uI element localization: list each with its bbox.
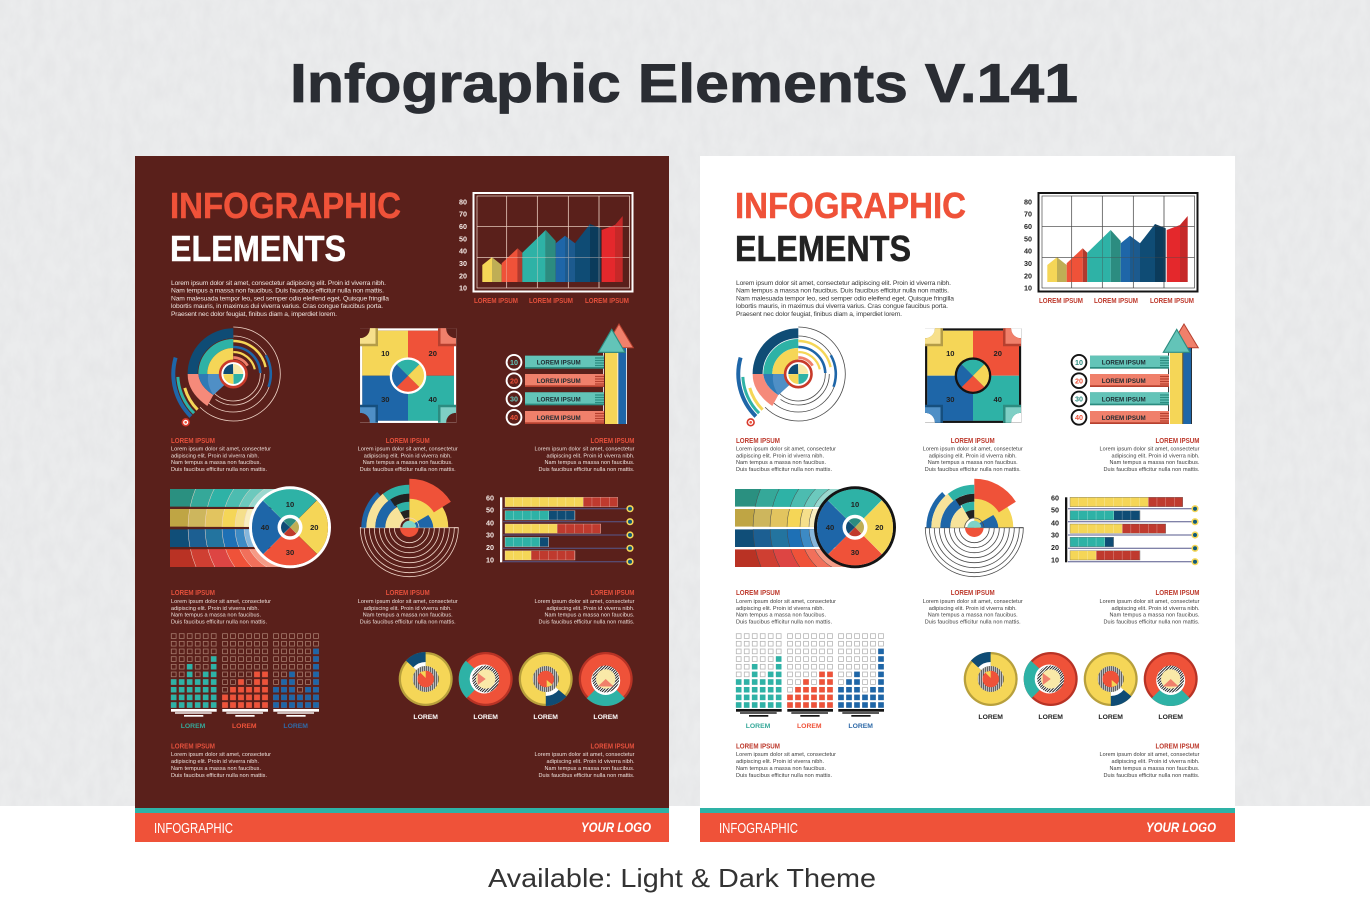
footer: YOUR LOGO xyxy=(581,819,651,835)
text block: row 2 left: LOREM IPSUM xyxy=(171,590,215,597)
text block: row 2 centre: Duis faucibus efficitur nulla non mattis. xyxy=(925,620,1021,626)
chart: area chart: 60 xyxy=(459,222,467,231)
chart: area chart: 80 xyxy=(459,197,467,206)
text block: row 2 left: Nam tempus a massa non faucibus. xyxy=(736,612,826,618)
chart: square quadrants xyxy=(925,328,1021,423)
chart: square quadrants: 30 xyxy=(381,395,390,404)
text block: intro: Nam malesuada tempor leo, sed semper odio eleifend eget. Quisque fringilla xyxy=(171,296,389,302)
text block: row 1 centre: Duis faucibus efficitur nulla non mattis. xyxy=(360,467,456,473)
chart: arrows with labelled bars: 30 xyxy=(510,395,518,404)
text block: row 1 right: LOREM IPSUM xyxy=(590,438,635,445)
chart: square unit grids: LOREM xyxy=(797,723,822,730)
chart: fan bars with pie: 20 xyxy=(875,523,884,532)
text block: row 1 centre: Nam tempus a massa non faucibus. xyxy=(363,460,453,466)
chart: area chart: 50 xyxy=(1024,234,1032,243)
text block: row 2 centre xyxy=(923,590,1023,626)
chart: area chart: LOREM IPSUM xyxy=(474,298,518,305)
chart: horizontal segmented bars xyxy=(486,494,633,564)
text block: row 1 right xyxy=(1100,438,1200,473)
text block: row 2 centre: Nam tempus a massa non faucibus. xyxy=(928,612,1018,618)
chart: arrows with labelled bars: LOREM IPSUM xyxy=(1102,378,1146,385)
chart: square unit grids: LOREM xyxy=(848,723,873,730)
chart: four donuts: LOREM xyxy=(1158,714,1183,721)
heading: infographic elements: INFOGRAPHIC xyxy=(735,185,966,226)
text block: row 2 right xyxy=(534,590,635,626)
text block: row 2 centre: Nam tempus a massa non faucibus. xyxy=(363,612,453,618)
text block: row 1 centre: Nam tempus a massa non faucibus. xyxy=(928,460,1018,466)
chart: fan bars with pie: 30 xyxy=(851,548,859,557)
text block: row 2 left: Duis faucibus efficitur nulla non mattis. xyxy=(171,620,267,626)
text block: row 1 centre xyxy=(358,438,458,473)
text block: row 3 left: Duis faucibus efficitur nulla non mattis. xyxy=(171,773,267,779)
chart: area chart: 10 xyxy=(1024,284,1032,293)
text block: row 2 right: Nam tempus a massa non faucibus. xyxy=(1110,612,1200,618)
text block: row 1 right: Duis faucibus efficitur nulla non mattis. xyxy=(538,467,635,473)
text block: row 2 left: adipiscing elit. Proin id viverra nibh. xyxy=(171,606,259,612)
chart: arrows with labelled bars: 20 xyxy=(1075,376,1083,385)
chart: four donuts xyxy=(397,650,635,721)
text block: row 2 right: Lorem ipsum dolor sit amet, consectetur xyxy=(534,599,635,605)
chart: arrows with labelled bars xyxy=(1072,324,1198,425)
text block: row 2 right: Nam tempus a massa non faucibus. xyxy=(544,612,635,618)
text block: row 1 left: LOREM IPSUM xyxy=(736,438,780,445)
text block: row 2 left: Lorem ipsum dolor sit amet, consectetur xyxy=(171,599,271,605)
subtitle: Available: Light & Dark Theme xyxy=(488,863,876,893)
footer xyxy=(700,808,1235,842)
text block: row 3 right xyxy=(1100,744,1200,779)
chart: square quadrants: 20 xyxy=(993,349,1002,358)
text block: row 2 centre xyxy=(358,590,458,626)
text block: intro: Lorem ipsum dolor sit amet, consectetur adipiscing elit. Proin id viverra nibh. xyxy=(171,280,386,287)
chart: area chart: 30 xyxy=(459,259,467,268)
text block: intro: Nam malesuada tempor leo, sed semper odio eleifend eget. Quisque fringilla xyxy=(736,296,954,302)
chart: arrows with labelled bars xyxy=(507,324,633,425)
chart: horizontal segmented bars: 20 xyxy=(1051,543,1059,552)
text block: row 2 centre: LOREM IPSUM xyxy=(951,590,995,597)
chart: square unit grids: LOREM xyxy=(746,723,771,730)
chart: area chart: 60 xyxy=(1024,222,1032,231)
chart: half radial xyxy=(355,474,463,582)
chart: fan bars with pie: 30 xyxy=(286,548,294,557)
text block: row 3 left: Duis faucibus efficitur nulla non mattis. xyxy=(736,773,832,779)
chart: four donuts: LOREM xyxy=(473,714,498,721)
chart: fan bars with pie: 20 xyxy=(310,523,319,532)
chart: square quadrants: 10 xyxy=(946,349,955,358)
chart: square quadrants: 10 xyxy=(381,349,390,358)
text block: row 2 left: Lorem ipsum dolor sit amet, consectetur xyxy=(736,599,836,605)
chart: horizontal segmented bars xyxy=(1051,494,1198,564)
text block: row 2 right: Duis faucibus efficitur nulla non mattis. xyxy=(538,620,635,626)
text block: row 3 right: Lorem ipsum dolor sit amet, consectetur xyxy=(1100,752,1200,758)
chart: radial arcs xyxy=(713,289,883,459)
chart: square unit grids: LOREM xyxy=(232,723,257,730)
text block: row 2 centre: Lorem ipsum dolor sit amet, consectetur xyxy=(358,599,458,605)
heading: infographic elements xyxy=(170,185,401,269)
text block: row 1 right: Nam tempus a massa non faucibus. xyxy=(1110,460,1200,466)
text block: row 3 left: Nam tempus a massa non faucibus. xyxy=(171,766,261,772)
text block: intro: Praesent nec dolor feugiat, finibus diam a, imperdiet lorem. xyxy=(171,311,337,318)
text block: row 3 left: adipiscing elit. Proin id viverra nibh. xyxy=(171,759,259,765)
text block: row 1 left xyxy=(171,438,271,473)
text block: row 1 right: Duis faucibus efficitur nulla non mattis. xyxy=(1104,467,1200,473)
text block: row 3 left: adipiscing elit. Proin id viverra nibh. xyxy=(736,759,824,765)
text block: row 3 left: LOREM IPSUM xyxy=(171,744,215,750)
heading: infographic elements: ELEMENTS xyxy=(735,228,911,269)
chart: square quadrants: 40 xyxy=(993,395,1002,404)
text block: row 1 right: Nam tempus a massa non faucibus. xyxy=(544,460,635,466)
text block: row 3 right: adipiscing elit. Proin id viverra nibh. xyxy=(1112,759,1200,765)
text block: row 1 left: Lorem ipsum dolor sit amet, consectetur xyxy=(171,446,271,452)
chart: fan bars with pie: 40 xyxy=(261,523,269,532)
chart: four donuts: LOREM xyxy=(533,714,558,721)
chart: area chart: LOREM IPSUM xyxy=(1039,298,1083,305)
text block: row 1 left: LOREM IPSUM xyxy=(171,438,215,445)
text block: row 2 left xyxy=(736,590,836,626)
text block: row 1 centre: adipiscing elit. Proin id viverra nibh. xyxy=(364,454,452,460)
text block: intro: Lorem ipsum dolor sit amet, consectetur adipiscing elit. Proin id viverra nibh. xyxy=(736,280,951,287)
text block: intro: lobortis mauris, in maximus dui viverra varius. Cras congue faucibus porta. xyxy=(171,303,383,310)
text block: row 3 right: Nam tempus a massa non faucibus. xyxy=(544,766,635,772)
text block: row 3 left: LOREM IPSUM xyxy=(736,744,780,750)
chart: area chart: 70 xyxy=(1024,210,1032,219)
chart: area chart: 80 xyxy=(1024,197,1032,206)
text block: row 1 right: Lorem ipsum dolor sit amet, consectetur xyxy=(534,446,635,452)
chart: area chart: 40 xyxy=(1024,247,1032,256)
chart: horizontal segmented bars: 10 xyxy=(486,555,494,564)
chart: fan bars with pie xyxy=(735,425,957,629)
chart: square quadrants: 30 xyxy=(946,395,955,404)
heading: infographic elements xyxy=(735,185,966,269)
heading: infographic elements: INFOGRAPHIC xyxy=(170,185,401,226)
text block: row 2 left: Duis faucibus efficitur nulla non mattis. xyxy=(736,620,832,626)
footer xyxy=(135,808,669,842)
panel: dark theme xyxy=(135,156,669,842)
text block: row 2 left: adipiscing elit. Proin id viverra nibh. xyxy=(736,606,824,612)
text block: row 1 right: adipiscing elit. Proin id viverra nibh. xyxy=(546,454,635,460)
chart: four donuts: LOREM xyxy=(593,714,618,721)
chart: half radial xyxy=(920,474,1028,582)
text block: row 2 left xyxy=(171,590,271,626)
chart: arrows with labelled bars: LOREM IPSUM xyxy=(537,378,581,385)
chart: horizontal segmented bars: 30 xyxy=(1051,531,1059,540)
text block: row 3 right: LOREM IPSUM xyxy=(1156,744,1200,750)
text block: row 3 right xyxy=(534,744,635,779)
chart: arrows with labelled bars: 30 xyxy=(1075,395,1083,404)
chart: area chart: LOREM IPSUM xyxy=(1094,298,1138,305)
chart: radial arcs xyxy=(148,289,318,459)
text block: intro: lobortis mauris, in maximus dui viverra varius. Cras congue faucibus porta. xyxy=(736,303,948,310)
text block: row 2 right: adipiscing elit. Proin id viverra nibh. xyxy=(1112,606,1200,612)
chart: arrows with labelled bars: LOREM IPSUM xyxy=(1102,360,1146,367)
text block: row 3 right: Duis faucibus efficitur nulla non mattis. xyxy=(538,773,635,779)
text block: row 1 left: adipiscing elit. Proin id viverra nibh. xyxy=(736,454,824,460)
text block: row 1 left: Lorem ipsum dolor sit amet, consectetur xyxy=(736,446,836,452)
text block: row 1 centre xyxy=(923,438,1023,473)
chart: arrows with labelled bars: 20 xyxy=(510,376,518,385)
text block: row 2 right: LOREM IPSUM xyxy=(1156,590,1200,597)
text block: intro xyxy=(736,280,954,318)
chart: arrows with labelled bars: LOREM IPSUM xyxy=(537,360,581,367)
chart: horizontal segmented bars: 60 xyxy=(486,494,494,503)
text block: row 2 right: Duis faucibus efficitur nulla non mattis. xyxy=(1104,620,1200,626)
text block: row 1 left: adipiscing elit. Proin id viverra nibh. xyxy=(171,454,259,460)
text block: row 1 left xyxy=(736,438,836,473)
chart: arrows with labelled bars: LOREM IPSUM xyxy=(1102,396,1146,403)
chart: four donuts: LOREM xyxy=(1098,714,1123,721)
text block: row 3 left xyxy=(736,744,836,779)
text block: row 2 right xyxy=(1100,590,1200,626)
text block: row 3 right: Nam tempus a massa non faucibus. xyxy=(1110,766,1200,772)
chart: horizontal segmented bars: 30 xyxy=(486,531,494,540)
footer: INFOGRAPHIC xyxy=(719,820,798,837)
text block: row 2 left: LOREM IPSUM xyxy=(736,590,780,597)
text block: row 2 right: Lorem ipsum dolor sit amet, consectetur xyxy=(1100,599,1200,605)
text block: row 2 centre: LOREM IPSUM xyxy=(386,590,430,597)
text block: row 1 left: Nam tempus a massa non faucibus. xyxy=(736,460,826,466)
text block: row 3 right: LOREM IPSUM xyxy=(590,744,635,750)
text block: row 1 centre: adipiscing elit. Proin id viverra nibh. xyxy=(929,454,1017,460)
chart: square quadrants: 20 xyxy=(428,349,437,358)
chart: area chart xyxy=(1024,193,1198,305)
chart: area chart: 70 xyxy=(459,210,467,219)
chart: square unit grids xyxy=(736,634,884,730)
text block: row 1 left: Duis faucibus efficitur nulla non mattis. xyxy=(171,467,267,473)
text block: row 1 right: adipiscing elit. Proin id viverra nibh. xyxy=(1112,454,1200,460)
text block: row 2 right: adipiscing elit. Proin id viverra nibh. xyxy=(546,606,635,612)
text block: intro: Nam tempus a massa non faucibus. Duis faucibus efficitur nulla non mattis. xyxy=(171,288,384,295)
text block: row 1 right: Lorem ipsum dolor sit amet, consectetur xyxy=(1100,446,1200,452)
text block: row 2 centre: Duis faucibus efficitur nulla non mattis. xyxy=(360,620,456,626)
chart: square unit grids: LOREM xyxy=(181,723,206,730)
title: Infographic Elements V.141 xyxy=(290,52,1078,114)
chart: fan bars with pie xyxy=(170,425,392,629)
text block: row 3 left: Nam tempus a massa non faucibus. xyxy=(736,766,826,772)
chart: four donuts: LOREM xyxy=(413,714,438,721)
chart: horizontal segmented bars: 50 xyxy=(486,506,494,515)
chart: four donuts xyxy=(962,650,1200,721)
chart: horizontal segmented bars: 20 xyxy=(486,543,494,552)
chart: four donuts: LOREM xyxy=(1038,714,1063,721)
text block: row 1 right xyxy=(534,438,635,473)
chart: area chart: LOREM IPSUM xyxy=(1150,298,1194,305)
text block: row 3 right: adipiscing elit. Proin id viverra nibh. xyxy=(546,759,635,765)
chart: square quadrants xyxy=(360,328,456,423)
chart: area chart: 30 xyxy=(1024,259,1032,268)
chart: fan bars with pie: 10 xyxy=(851,500,859,509)
chart: horizontal segmented bars: 40 xyxy=(486,518,494,527)
chart: area chart: 20 xyxy=(459,271,467,280)
text block: row 1 centre: LOREM IPSUM xyxy=(951,438,995,445)
text block: row 3 left xyxy=(171,744,271,779)
text block: row 1 right: LOREM IPSUM xyxy=(1156,438,1200,445)
chart: arrows with labelled bars: 40 xyxy=(1075,413,1083,422)
text block: row 1 centre: Lorem ipsum dolor sit amet, consectetur xyxy=(923,446,1023,452)
text block: row 3 left: Lorem ipsum dolor sit amet, consectetur xyxy=(171,752,271,758)
text block: intro: Nam tempus a massa non faucibus. Duis faucibus efficitur nulla non mattis. xyxy=(736,288,949,295)
chart: arrows with labelled bars: 10 xyxy=(1075,358,1083,367)
text block: row 1 left: Duis faucibus efficitur nulla non mattis. xyxy=(736,467,832,473)
chart: arrows with labelled bars: 10 xyxy=(510,358,518,367)
text block: row 3 right: Duis faucibus efficitur nulla non mattis. xyxy=(1104,773,1200,779)
text block: row 1 left: Nam tempus a massa non faucibus. xyxy=(171,460,261,466)
chart: area chart: 10 xyxy=(459,284,467,293)
chart: square unit grids: LOREM xyxy=(283,723,308,730)
chart: arrows with labelled bars: 40 xyxy=(510,413,518,422)
chart: arrows with labelled bars: LOREM IPSUM xyxy=(537,415,581,422)
text block: row 1 centre: Lorem ipsum dolor sit amet, consectetur xyxy=(358,446,458,452)
text block: row 3 right: Lorem ipsum dolor sit amet, consectetur xyxy=(534,752,635,758)
chart: area chart: LOREM IPSUM xyxy=(585,298,629,305)
text block: row 3 left: Lorem ipsum dolor sit amet, consectetur xyxy=(736,752,836,758)
chart: fan bars with pie: 10 xyxy=(286,500,294,509)
text block: row 1 centre: LOREM IPSUM xyxy=(386,438,430,445)
text block: row 2 left: Nam tempus a massa non faucibus. xyxy=(171,612,261,618)
chart: fan bars with pie: 40 xyxy=(826,523,834,532)
chart: area chart: LOREM IPSUM xyxy=(529,298,573,305)
chart: square unit grids xyxy=(171,634,319,730)
text block: row 2 centre: adipiscing elit. Proin id viverra nibh. xyxy=(364,606,452,612)
chart: area chart: 40 xyxy=(459,247,467,256)
chart: horizontal segmented bars: 60 xyxy=(1051,494,1059,503)
chart: horizontal segmented bars: 40 xyxy=(1051,518,1059,527)
chart: horizontal segmented bars: 50 xyxy=(1051,506,1059,515)
chart: area chart: 20 xyxy=(1024,271,1032,280)
chart: arrows with labelled bars: LOREM IPSUM xyxy=(1102,415,1146,422)
panel: light theme xyxy=(700,156,1235,842)
chart: arrows with labelled bars: LOREM IPSUM xyxy=(537,396,581,403)
footer: YOUR LOGO xyxy=(1146,819,1216,835)
footer: INFOGRAPHIC xyxy=(154,820,233,837)
chart: area chart: 50 xyxy=(459,234,467,243)
text block: row 2 right: LOREM IPSUM xyxy=(590,590,635,597)
chart: four donuts: LOREM xyxy=(978,714,1003,721)
text block: row 2 centre: Lorem ipsum dolor sit amet, consectetur xyxy=(923,599,1023,605)
heading: infographic elements: ELEMENTS xyxy=(170,228,346,269)
text block: intro xyxy=(171,280,389,318)
chart: area chart xyxy=(459,193,632,305)
text block: intro: Praesent nec dolor feugiat, finibus diam a, imperdiet lorem. xyxy=(736,311,902,318)
chart: horizontal segmented bars: 10 xyxy=(1051,555,1059,564)
text block: row 2 centre: adipiscing elit. Proin id viverra nibh. xyxy=(929,606,1017,612)
chart: square quadrants: 40 xyxy=(428,395,437,404)
text block: row 1 centre: Duis faucibus efficitur nulla non mattis. xyxy=(925,467,1021,473)
